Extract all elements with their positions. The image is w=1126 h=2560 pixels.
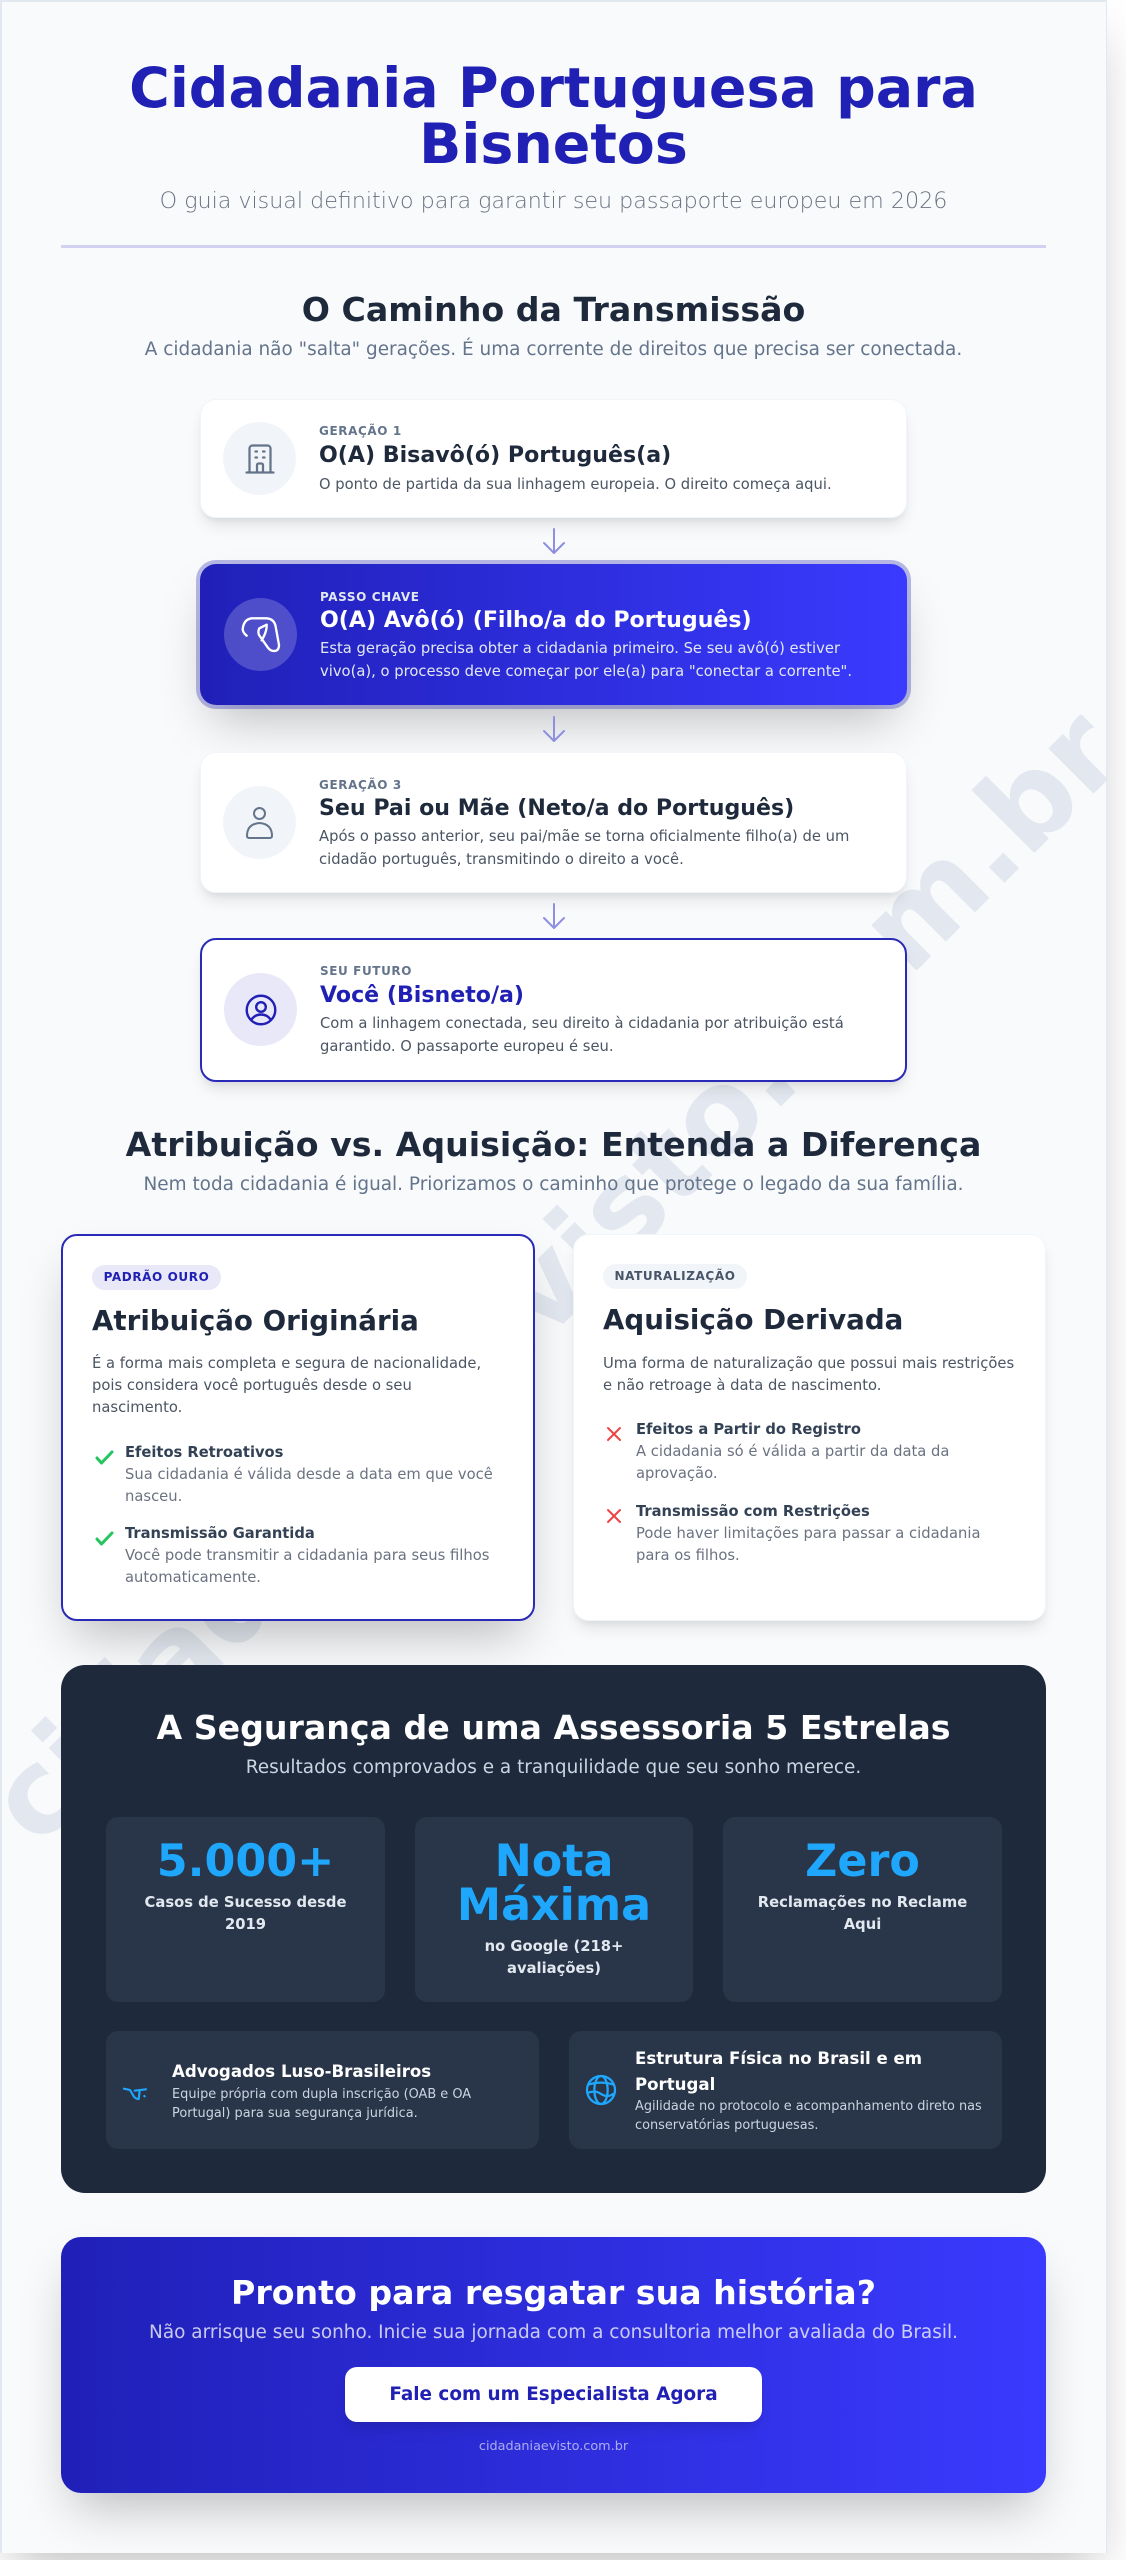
icon: cross bbox=[607, 1427, 621, 1441]
feature card: offices bbox=[569, 2031, 1002, 2149]
stat: cases bbox=[106, 1817, 385, 2002]
feature: restricted transmission: para os filhos. bbox=[636, 1547, 740, 1564]
arrow bbox=[543, 716, 565, 742]
icon: check bbox=[95, 1531, 114, 1546]
description: Uma forma de naturalização que possui mais restrições bbox=[603, 1355, 1014, 1372]
step text: PASSO CHAVE bbox=[320, 590, 420, 604]
divider bbox=[61, 245, 1046, 248]
stat: cases: 2019 bbox=[225, 1916, 266, 1933]
step card: key step bbox=[200, 564, 907, 705]
step text: O(A) Avô(ó) (Filho/a do Português) bbox=[320, 607, 752, 633]
arrow bbox=[543, 903, 565, 929]
feature: guaranteed transmission: Você pode transmitir a cidadania para seus filhos bbox=[125, 1547, 489, 1564]
subtitle: O guia visual definitivo para garantir seu passaporte europeu em 2026 bbox=[160, 188, 947, 214]
offices text: Portugal bbox=[635, 2075, 715, 2094]
step text: SEU FUTURO bbox=[320, 964, 412, 978]
feature card: lawyers bbox=[106, 2031, 539, 2149]
feature: retroactive: Efeitos Retroativos bbox=[125, 1444, 283, 1461]
step text bbox=[320, 590, 852, 680]
lawyers text: Portugal) para sua segurança jurídica. bbox=[172, 2106, 418, 2121]
cta heading: Pronto para resgatar sua história? bbox=[231, 2273, 876, 2312]
panel: security bbox=[61, 1665, 1046, 2193]
feature: guaranteed transmission: automaticamente. bbox=[125, 1569, 261, 1586]
description: nascimento. bbox=[92, 1399, 182, 1416]
step text: Você (Bisneto/a) bbox=[320, 982, 524, 1008]
feature: retroactive: Sua cidadania é válida desde a data em que você bbox=[125, 1466, 493, 1483]
icon: fingerprint bbox=[224, 598, 297, 671]
feature: effects from registration: A cidadania só é válida a partir da data da bbox=[636, 1443, 949, 1460]
feature: effects from registration bbox=[607, 1421, 949, 1482]
step card: generation 3 bbox=[200, 752, 907, 893]
stat: zero complaints bbox=[723, 1817, 1002, 2002]
step text bbox=[319, 424, 832, 493]
offices text bbox=[635, 2049, 982, 2133]
title bbox=[129, 57, 978, 176]
panel: call to action bbox=[61, 2237, 1046, 2493]
step text: vivo(a), o processo deve começar por ele(a) para "conectar a corrente". bbox=[320, 663, 852, 680]
step text: Esta geração precisa obter a cidadania primeiro. Se seu avô(ó) estiver bbox=[320, 640, 840, 657]
step text: cidadão português, transmitindo o direito a você. bbox=[319, 851, 684, 868]
feature: restricted transmission bbox=[607, 1503, 981, 1564]
stat: cases: 5.000+ bbox=[157, 1836, 334, 1887]
description bbox=[92, 1354, 481, 1416]
security heading: A Segurança de uma Assessoria 5 Estrelas bbox=[156, 1708, 951, 1747]
cta button: Fale com um Especialista Agora bbox=[389, 2384, 718, 2405]
feature: guaranteed transmission: Transmissão Garantida bbox=[125, 1525, 315, 1542]
cta subheading: Não arrisque seu sonho. Inicie sua jornada com a consultoria melhor avaliada do Brasil. bbox=[149, 2322, 958, 2343]
stat: rating: Nota bbox=[495, 1836, 613, 1887]
description bbox=[603, 1355, 1014, 1394]
section heading: comparison: Atribuição vs. Aquisição: Entenda a Diferença bbox=[126, 1125, 981, 1164]
offices text: Agilidade no protocolo e acompanhamento direto nas bbox=[635, 2099, 982, 2114]
step text bbox=[320, 964, 844, 1055]
stat: rating: no Google (218+ bbox=[485, 1938, 623, 1955]
step text: Após o passo anterior, seu pai/mãe se torna oficialmente filho(a) de um bbox=[319, 828, 849, 845]
badge: PADRÃO OURO bbox=[104, 1270, 209, 1284]
offices text: Estrutura Física no Brasil e em bbox=[635, 2049, 922, 2068]
icon: building bbox=[223, 422, 296, 495]
step text: Com a linhagem conectada, seu direito à cidadania por atribuição está bbox=[320, 1015, 844, 1032]
cta button bbox=[345, 2367, 762, 2422]
lawyers text: Equipe própria com dupla inscrição (OAB e OA bbox=[172, 2087, 471, 2102]
title: Cidadania Portuguesa para bbox=[129, 57, 978, 121]
stat: rating: avaliações) bbox=[507, 1960, 601, 1977]
icon: lawyers bbox=[122, 2088, 148, 2100]
feature: effects from registration: aprovação. bbox=[636, 1465, 718, 1482]
arrow bbox=[543, 528, 565, 554]
heading: Aquisição Derivada bbox=[603, 1303, 903, 1336]
section subheading: transmission: A cidadania não "salta" gerações. É uma corrente de direitos que precisa ser conectada. bbox=[145, 339, 962, 360]
icon: check bbox=[95, 1450, 114, 1465]
feature: retroactive: nasceu. bbox=[125, 1488, 182, 1505]
website: cidadaniaevisto.com.br bbox=[479, 2439, 628, 2454]
icon: person bbox=[223, 786, 296, 859]
step text: GERAÇÃO 3 bbox=[319, 778, 402, 792]
section subheading: comparison: Nem toda cidadania é igual. Priorizamos o caminho que protege o legado da sua família. bbox=[143, 1174, 964, 1195]
heading: Atribuição Originária bbox=[92, 1304, 419, 1337]
step text: GERAÇÃO 1 bbox=[319, 424, 402, 438]
feature: restricted transmission: Pode haver limitações para passar a cidadania bbox=[636, 1525, 981, 1542]
feature: retroactive bbox=[95, 1444, 493, 1505]
stat: rating: Máxima bbox=[457, 1880, 651, 1931]
panel: attribution bbox=[61, 1234, 535, 1621]
security subheading: Resultados comprovados e a tranquilidade que seu sonho merece. bbox=[246, 1757, 861, 1778]
offices text: conservatórias portuguesas. bbox=[635, 2118, 818, 2133]
badge bbox=[603, 1264, 747, 1289]
badge bbox=[92, 1265, 221, 1290]
stat: cases: Casos de Sucesso desde bbox=[145, 1894, 346, 1911]
step text: O ponto de partida da sua linhagem europeia. O direito começa aqui. bbox=[319, 476, 832, 493]
stat: rating bbox=[415, 1817, 693, 2002]
section heading: transmission: O Caminho da Transmissão bbox=[302, 290, 805, 329]
panel: acquisition bbox=[573, 1234, 1046, 1621]
step card: generation 1 bbox=[200, 399, 907, 518]
step text: Seu Pai ou Mãe (Neto/a do Português) bbox=[319, 795, 794, 821]
icon: cross bbox=[607, 1509, 621, 1523]
lawyers text bbox=[172, 2062, 471, 2121]
stat: zero complaints: Aqui bbox=[844, 1916, 881, 1933]
lawyers text: Advogados Luso-Brasileiros bbox=[172, 2062, 431, 2081]
feature: restricted transmission: Transmissão com Restrições bbox=[636, 1503, 870, 1520]
icon: user circle bbox=[224, 973, 297, 1046]
feature: guaranteed transmission bbox=[95, 1525, 489, 1586]
description: pois considera você português desde o seu bbox=[92, 1377, 412, 1394]
description: É a forma mais completa e segura de nacionalidade, bbox=[92, 1355, 481, 1372]
stat: zero complaints: Reclamações no Reclame bbox=[758, 1894, 967, 1911]
stat: zero complaints: Zero bbox=[805, 1836, 920, 1887]
icon: globe bbox=[586, 2074, 616, 2106]
step card: your future bbox=[200, 938, 907, 1082]
title: Bisnetos bbox=[419, 112, 688, 176]
feature: effects from registration: Efeitos a Partir do Registro bbox=[636, 1421, 861, 1438]
step text bbox=[319, 778, 849, 868]
step text: garantido. O passaporte europeu é seu. bbox=[320, 1038, 614, 1055]
step text: O(A) Bisavô(ó) Português(a) bbox=[319, 442, 671, 468]
description: e não retroage à data de nascimento. bbox=[603, 1377, 881, 1394]
badge: NATURALIZAÇÃO bbox=[614, 1269, 736, 1283]
